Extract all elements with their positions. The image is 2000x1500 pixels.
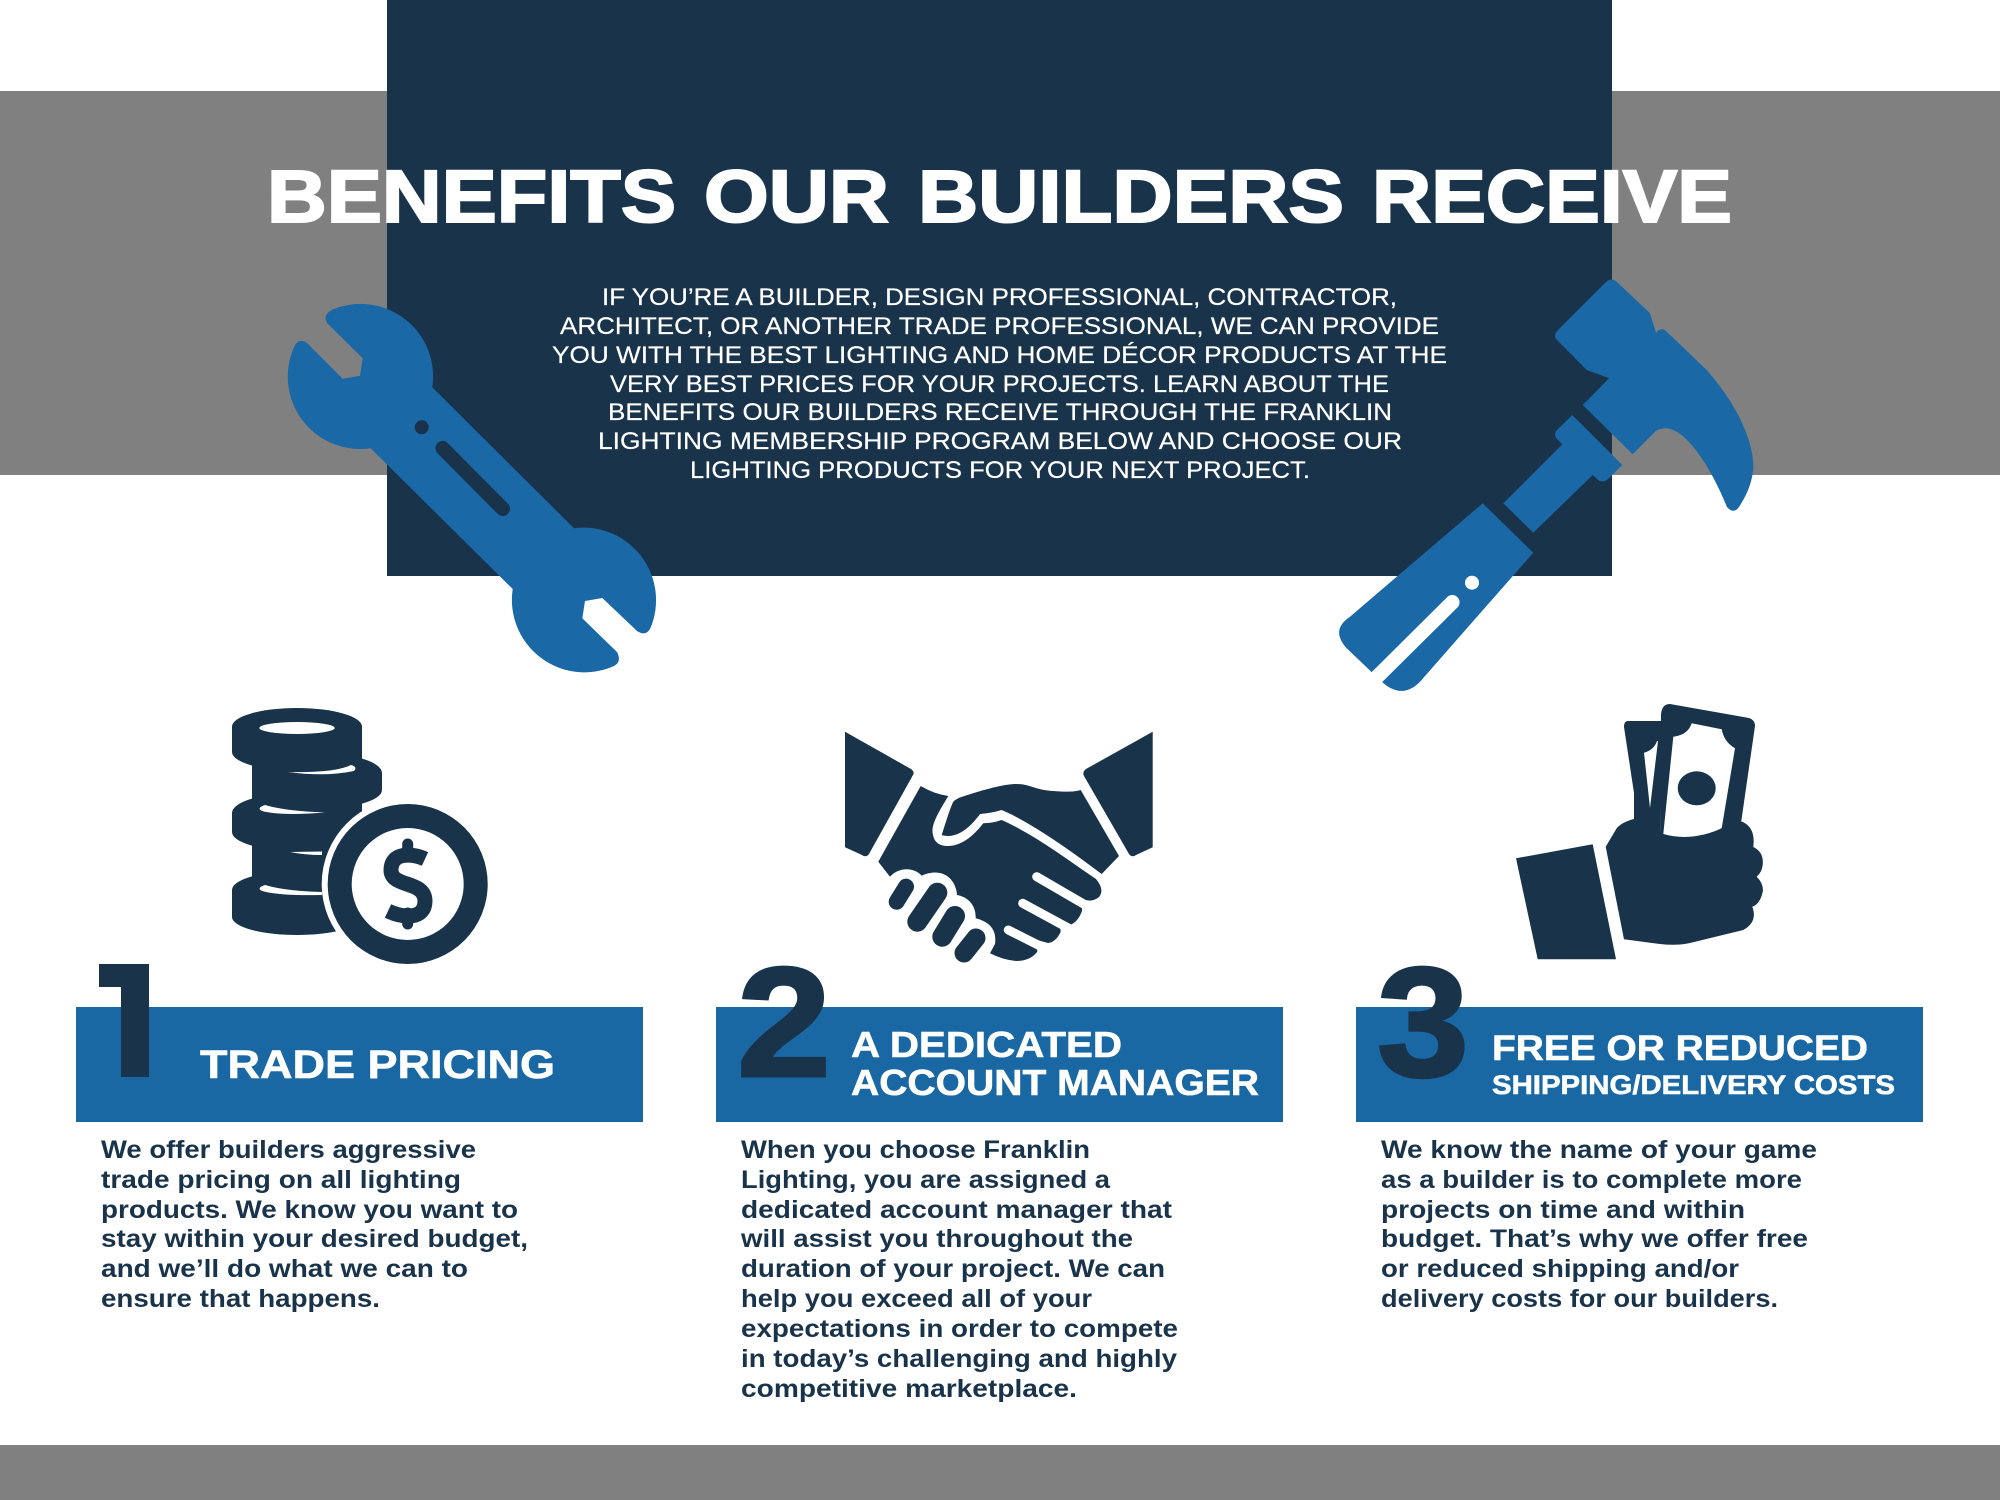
icon: coins with dollar <box>232 708 494 970</box>
title: BUILDERS <box>918 155 1344 238</box>
header bar 1 <box>76 1007 643 1122</box>
panel: trade pricing <box>76 937 643 1313</box>
body text 2: dedicated account manager that <box>741 1196 1173 1224</box>
heading 3: FREE OR REDUCED <box>1492 1029 1868 1068</box>
body text 2 <box>740 1136 1178 1403</box>
intro text block: IF YOU’RE A BUILDER, DESIGN PROFESSIONAL, CONTRACTOR, <box>602 284 1397 311</box>
intro text block: BENEFITS OUR BUILDERS RECEIVE THROUGH THE FRANKLIN <box>608 399 1392 426</box>
body text 3: or reduced shipping and/or <box>1381 1255 1739 1283</box>
panel: free or reduced shipping <box>1356 936 1923 1313</box>
icon: wrench <box>288 304 656 672</box>
heading 2: ACCOUNT MANAGER <box>851 1062 1259 1103</box>
heading 2: A DEDICATED <box>851 1024 1122 1065</box>
body text 2: When you choose Franklin <box>741 1136 1090 1164</box>
intro text block: LIGHTING MEMBERSHIP PROGRAM BELOW AND CHOOSE OUR <box>598 428 1402 455</box>
numeral 2: 2 <box>737 936 831 1110</box>
body text 2: Lighting, you are assigned a <box>741 1166 1111 1194</box>
body text 2: expectations in order to compete <box>741 1315 1178 1343</box>
icon: hand holding cash <box>1516 704 1763 959</box>
top gray band <box>0 91 2000 475</box>
intro text block: VERY BEST PRICES FOR YOUR PROJECTS. LEARN ABOUT THE <box>610 371 1389 398</box>
intro text block: LIGHTING PRODUCTS FOR YOUR NEXT PROJECT. <box>690 457 1310 484</box>
numeral 1 <box>99 964 149 1077</box>
heading 2 <box>851 1024 1259 1103</box>
heading 3: SHIPPING/DELIVERY COSTS <box>1492 1070 1895 1100</box>
body text 2: duration of your project. We can <box>741 1255 1165 1283</box>
heading 3 <box>1492 1029 1895 1100</box>
title: BENEFITS <box>267 155 676 238</box>
body text 3: as a builder is to complete more <box>1381 1166 1802 1194</box>
header bar 2 <box>716 1007 1283 1122</box>
icon: hammer <box>1339 280 1753 691</box>
body text 2: help you exceed all of your <box>741 1285 1092 1313</box>
header bar 3 <box>1356 1007 1923 1122</box>
body text 1: stay within your desired budget, <box>101 1225 528 1253</box>
body text 1 <box>101 1136 528 1313</box>
body text 1: We offer builders aggressive <box>101 1136 476 1164</box>
intro text block: ARCHITECT, OR ANOTHER TRADE PROFESSIONAL, WE CAN PROVIDE <box>560 313 1439 340</box>
body text 2: will assist you throughout the <box>740 1225 1133 1253</box>
numeral 1: 1 <box>90 937 156 1111</box>
body text 1: ensure that happens. <box>101 1285 380 1313</box>
body text 1: products. We know you want to <box>101 1196 518 1224</box>
intro text block <box>552 284 1447 484</box>
numeral 3: 3 <box>1377 936 1469 1110</box>
body text 3 <box>1381 1136 1817 1313</box>
navy header panel <box>387 0 1612 576</box>
body text 1: trade pricing on all lighting <box>101 1166 461 1194</box>
body text 2: in today’s challenging and highly <box>741 1345 1177 1373</box>
icon: handshake <box>845 732 1153 961</box>
body text 2: competitive marketplace. <box>741 1375 1077 1403</box>
body text 1: and we’ll do what we can to <box>101 1255 468 1283</box>
intro text block: YOU WITH THE BEST LIGHTING AND HOME DÉCOR PRODUCTS AT THE <box>552 342 1447 369</box>
title: RECEIVE <box>1372 155 1732 238</box>
body text 3: We know the name of your game <box>1381 1136 1817 1164</box>
body text 3: delivery costs for our builders. <box>1381 1285 1778 1313</box>
title: OUR <box>704 155 889 238</box>
panel: dedicated account manager <box>716 936 1283 1403</box>
body text 3: budget. That’s why we offer free <box>1381 1225 1808 1253</box>
heading 1: TRADE PRICING <box>200 1043 555 1087</box>
bottom gray band <box>0 1445 2000 1500</box>
title <box>267 155 1732 238</box>
body text 3: projects on time and within <box>1381 1196 1745 1224</box>
